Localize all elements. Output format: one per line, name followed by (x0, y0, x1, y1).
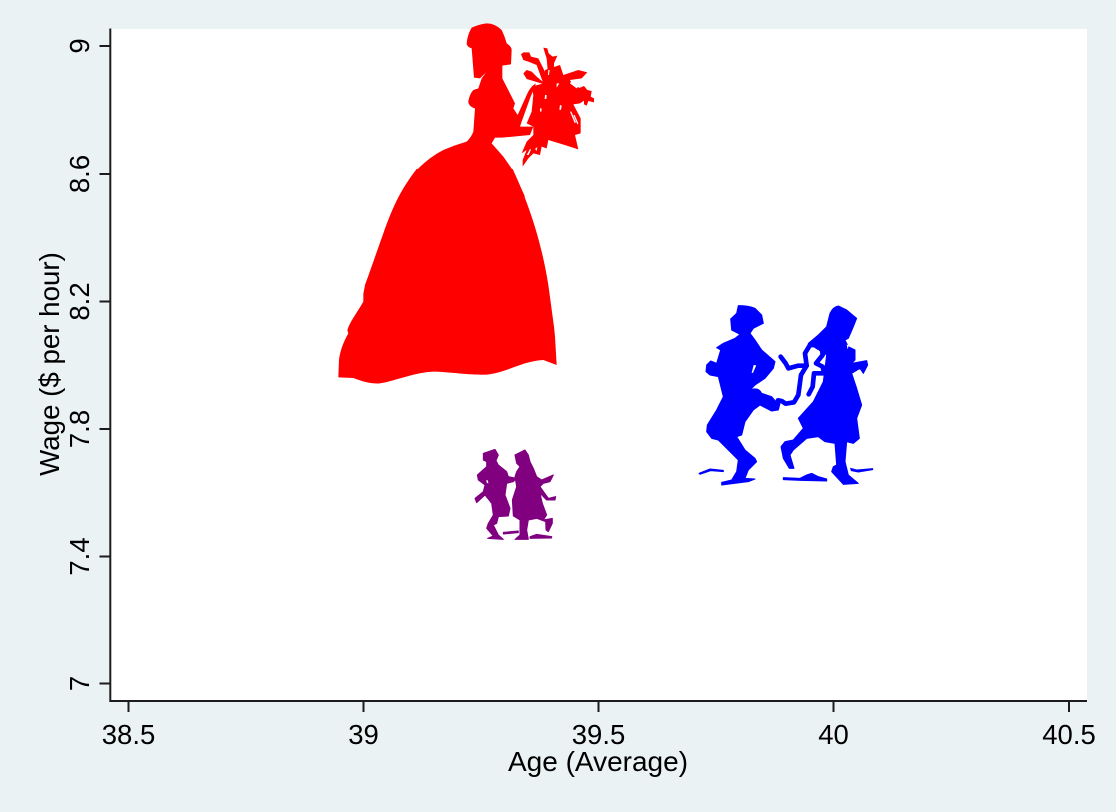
x axis title: Age (Average) (508, 746, 688, 777)
bouquet (521, 48, 594, 167)
x axis (110, 701, 1087, 712)
boy (706, 306, 780, 485)
y axis tick labels: 8.6 (64, 155, 95, 193)
y axis tick labels: 9 (64, 38, 95, 54)
y axis tick labels: 7 (64, 676, 95, 691)
y axis tick labels: 7.8 (64, 410, 95, 448)
marker: blue dancing couple (699, 306, 873, 485)
ground marks (699, 468, 873, 481)
marker: red lady with bouquet (338, 23, 594, 383)
right dancer (512, 450, 556, 539)
y axis tick labels (64, 38, 95, 691)
y axis tick labels: 7.4 (64, 537, 95, 576)
y axis title: Wage ($ per hour) (34, 252, 65, 476)
ribbons (778, 345, 824, 404)
x axis tick labels (102, 719, 1096, 750)
x axis tick labels: 40.5 (1042, 719, 1096, 750)
bouquet gaps (522, 70, 578, 155)
left dancer (475, 449, 517, 539)
x axis tick labels: 39 (348, 719, 379, 750)
x axis tick labels: 40 (818, 719, 849, 750)
y axis (100, 28, 110, 702)
plot area (111, 29, 1087, 700)
ribbon gaps (807, 344, 849, 383)
y axis tick labels: 8.2 (64, 282, 95, 321)
x axis tick labels: 38.5 (102, 719, 155, 750)
x axis tick labels: 39.5 (572, 719, 625, 750)
girl (781, 306, 868, 484)
ground marks (503, 531, 552, 538)
marker: purple dancing couple (475, 449, 556, 539)
